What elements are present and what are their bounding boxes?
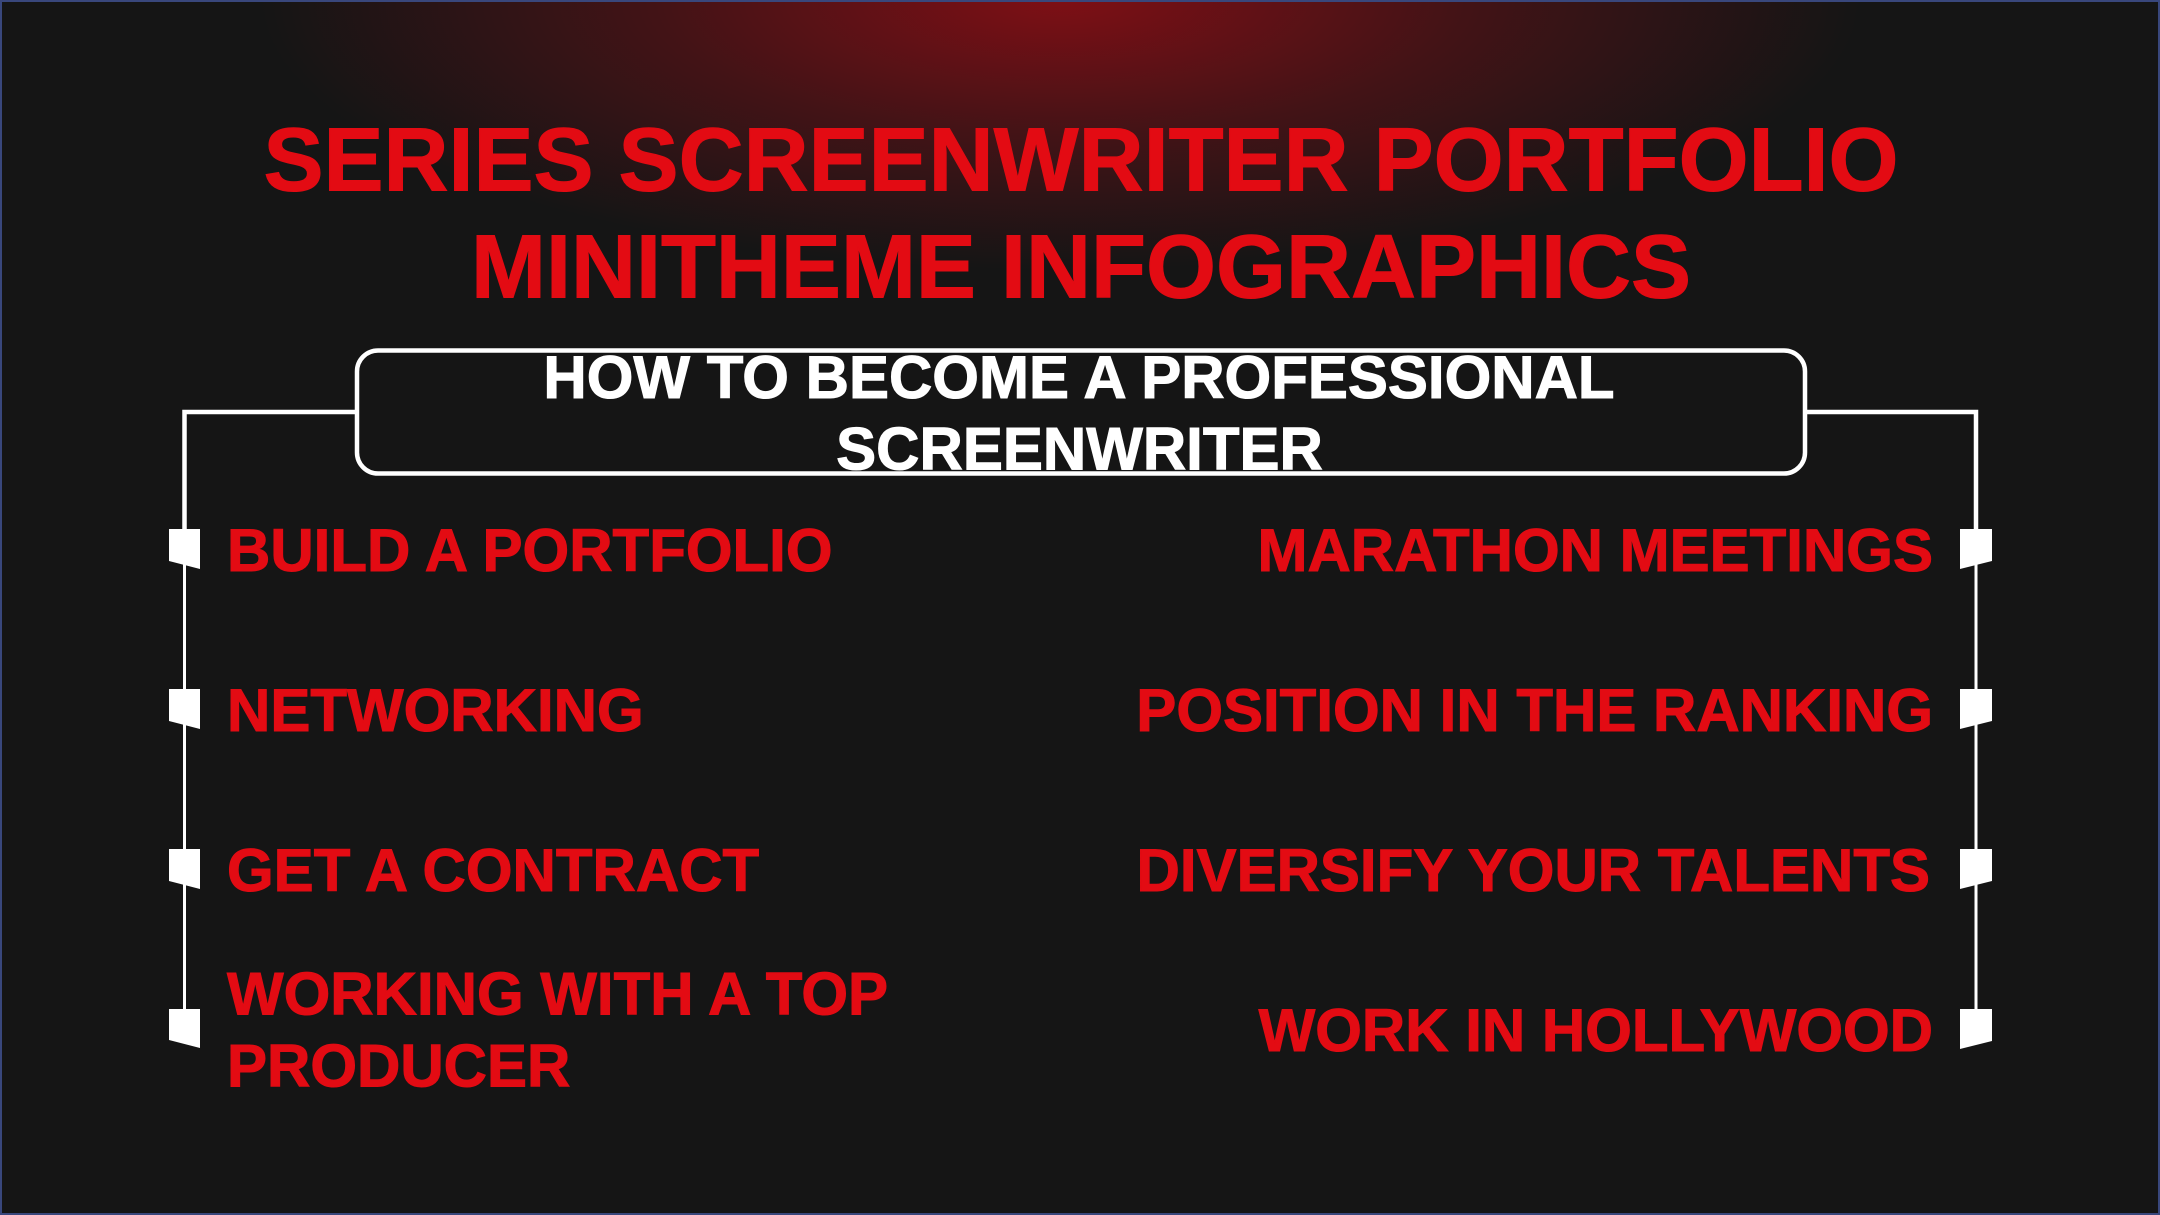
title: MINITHEME INFOGRAPHICS <box>471 218 1691 318</box>
right list: MARATHON MEETINGS <box>1257 517 1933 584</box>
heading box <box>357 344 1805 482</box>
left list: GET A CONTRACT <box>227 837 759 904</box>
title <box>263 110 1899 318</box>
left list: WORKING WITH A TOP <box>227 960 888 1028</box>
title: SERIES SCREENWRITER PORTFOLIO <box>263 110 1899 210</box>
left list: NETWORKING <box>227 677 644 744</box>
right markers <box>1960 529 1992 1049</box>
left list <box>227 517 888 1100</box>
heading box: HOW TO BECOME A PROFESSIONAL <box>543 344 1615 411</box>
right list: POSITION IN THE RANKING <box>1136 677 1933 744</box>
connector lines <box>184 412 1976 1009</box>
left list: PRODUCER <box>227 1032 570 1100</box>
left markers <box>169 529 200 1048</box>
right list: WORK IN HOLLYWOOD <box>1259 997 1933 1064</box>
right list <box>1136 517 1933 1064</box>
left list: BUILD A PORTFOLIO <box>227 517 833 584</box>
heading box: SCREENWRITER <box>836 416 1323 482</box>
right list: DIVERSIFY YOUR TALENTS <box>1137 837 1930 904</box>
